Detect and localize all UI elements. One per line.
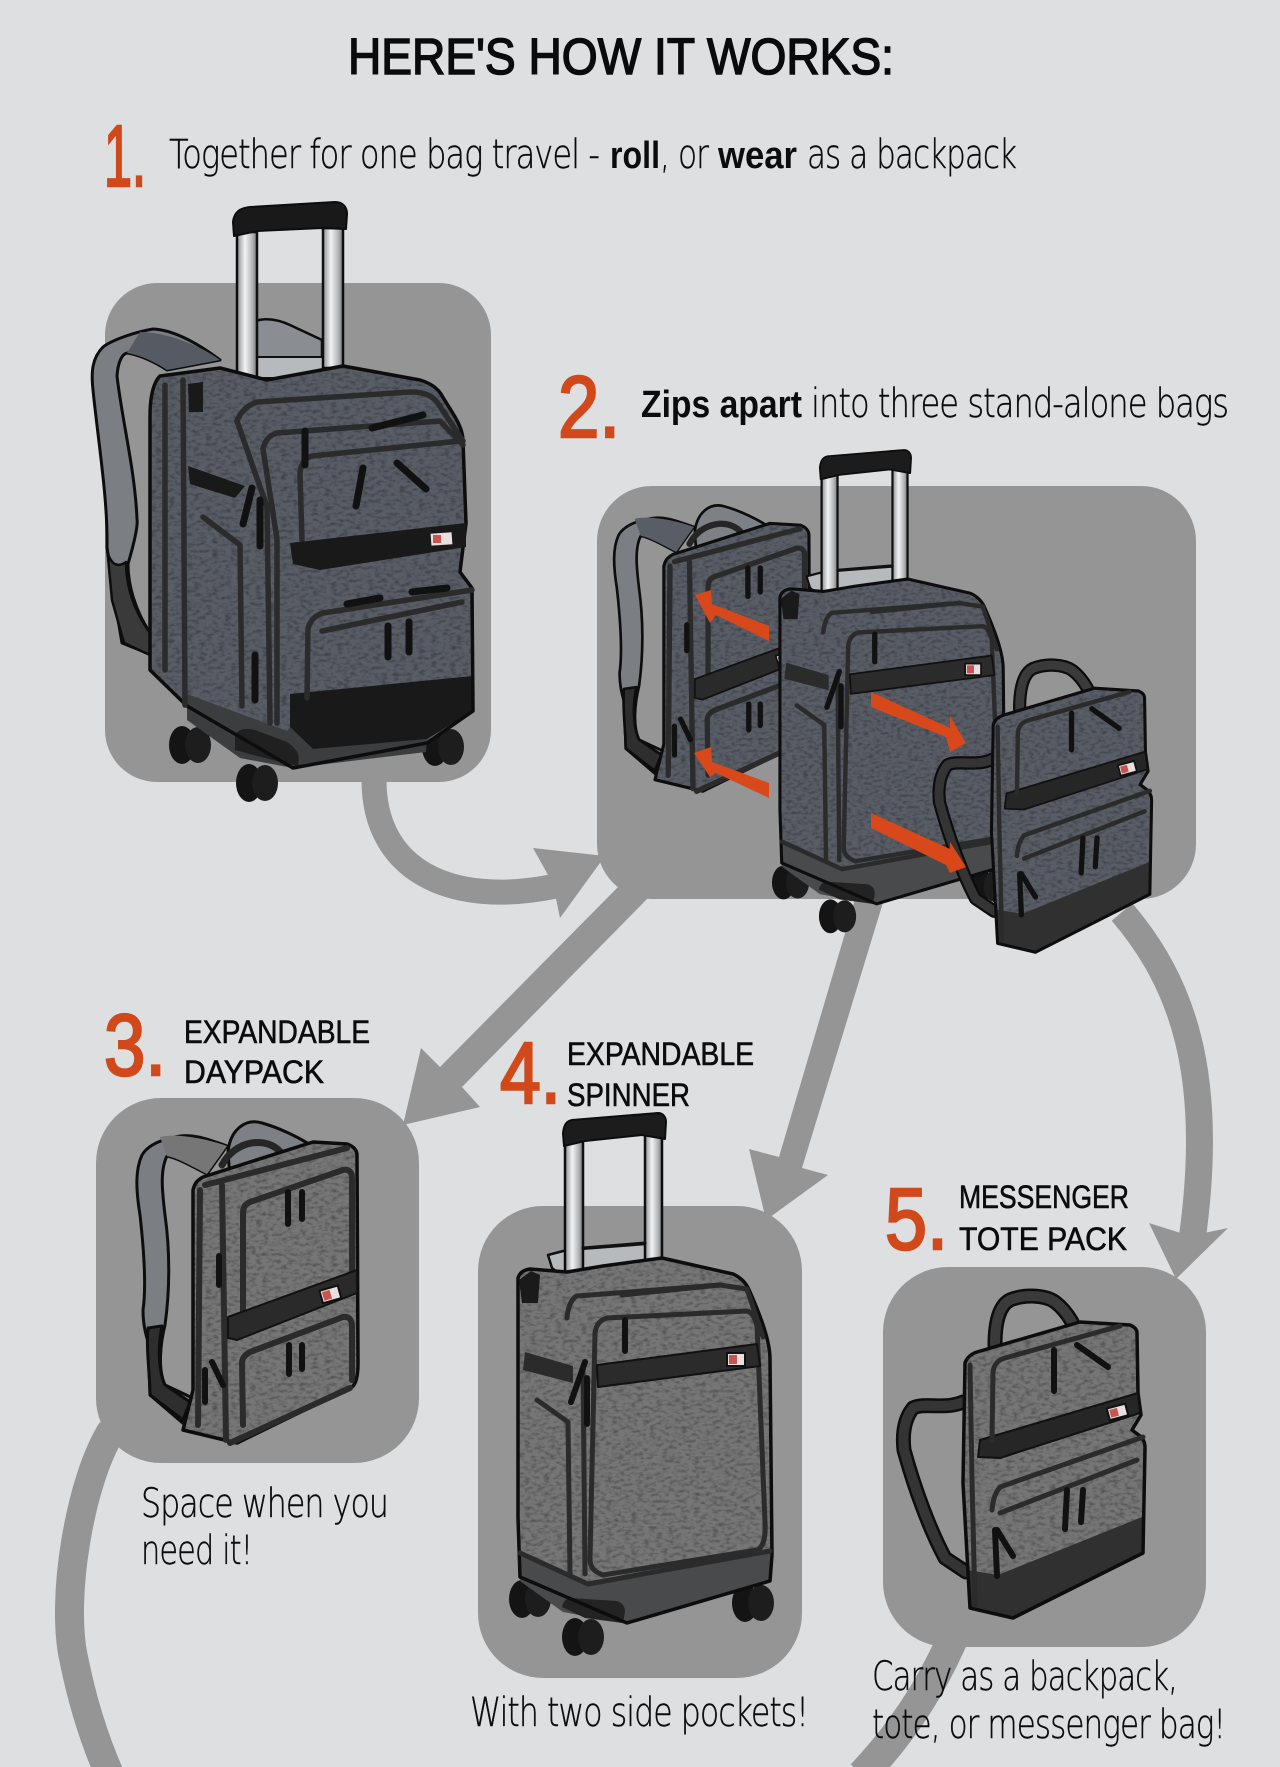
step 4 label: SPINNER (567, 1077, 690, 1113)
step 5 label (959, 1179, 1129, 1257)
illustration: spinner (509, 1113, 774, 1656)
step 1 heading (104, 108, 1016, 205)
caption: daypack: Space when you (141, 1481, 388, 1527)
panel 4: expandable spinner (478, 1113, 802, 1678)
flow arrow: tote continuing off page (862, 1640, 952, 1767)
strap band with label (290, 523, 466, 570)
caption: daypack: need it! (141, 1528, 252, 1574)
step 3 label: DAYPACK (184, 1054, 324, 1090)
step 1 text: roll (610, 135, 660, 177)
panel 2: zips apart (597, 450, 1196, 952)
step 2 heading (558, 359, 1228, 456)
caption: tote: Carry as a backpack, (872, 1654, 1177, 1700)
flow arrow: panel 2 to messenger tote (1122, 912, 1228, 1279)
caption: spinner: With two side pockets! (470, 1690, 808, 1736)
illustration: detached spinner (772, 450, 1007, 933)
step 1 text: wear (717, 135, 797, 177)
illustration: tote (903, 1296, 1145, 1618)
panel 5: messenger tote pack (883, 1267, 1206, 1647)
number 5: 5. (885, 1171, 948, 1268)
caption: tote (872, 1654, 1225, 1748)
step 3 label: EXPANDABLE (184, 1014, 370, 1050)
panel 1: together (92, 202, 491, 802)
flow arrow: panel 2 to daypack (403, 883, 648, 1125)
black lower band (290, 676, 473, 749)
step 3 label (184, 1014, 370, 1090)
number 2: 2. (558, 359, 620, 456)
zippers (165, 380, 472, 723)
number 4: 4. (500, 1025, 561, 1122)
title: HERE'S HOW IT WORKS: (348, 28, 894, 85)
telescoping handle (233, 202, 347, 382)
flow arrow: panel 1 to panel 2 (374, 780, 605, 918)
step 4 label (567, 1036, 754, 1113)
panel 3: expandable daypack (96, 1098, 419, 1463)
step 3 heading (104, 997, 370, 1094)
step 2 text (641, 381, 1228, 427)
fabric body (150, 366, 473, 768)
illustration: detached backpack (614, 505, 810, 791)
flow arrow: daypack continuing off page (69, 1430, 112, 1767)
number 3: 3. (104, 997, 166, 1094)
step 1 text: Together for one bag travel - (169, 132, 599, 178)
step 5 label: TOTE PACK (959, 1221, 1127, 1257)
step 1 text: , or (660, 132, 709, 178)
number 1: 1. (104, 108, 146, 205)
step 1 text (169, 132, 1016, 178)
illustration: daypack (137, 1122, 358, 1443)
shoulder strap (92, 329, 220, 655)
flow arrow: panel 2 to spinner (749, 896, 885, 1220)
caption: daypack (141, 1481, 388, 1574)
base (187, 694, 427, 768)
zipper pulls (243, 415, 447, 700)
step 4 label: EXPANDABLE (567, 1036, 754, 1072)
illustration: detached tote (939, 665, 1152, 952)
wheels (169, 726, 464, 802)
illustration: rolling backpack (92, 202, 473, 802)
orange arrow: tote upper (871, 692, 966, 752)
step 5 label: MESSENGER (959, 1179, 1129, 1215)
orange arrow: backpack upper (695, 590, 769, 641)
step 5 heading (885, 1171, 1129, 1268)
orange arrow: backpack lower (694, 747, 769, 798)
step 2 text: Zips apart (641, 384, 802, 426)
step 4 heading (500, 1025, 754, 1122)
step 1 text: as a backpack (807, 132, 1016, 178)
orange arrow: tote lower (871, 813, 966, 873)
